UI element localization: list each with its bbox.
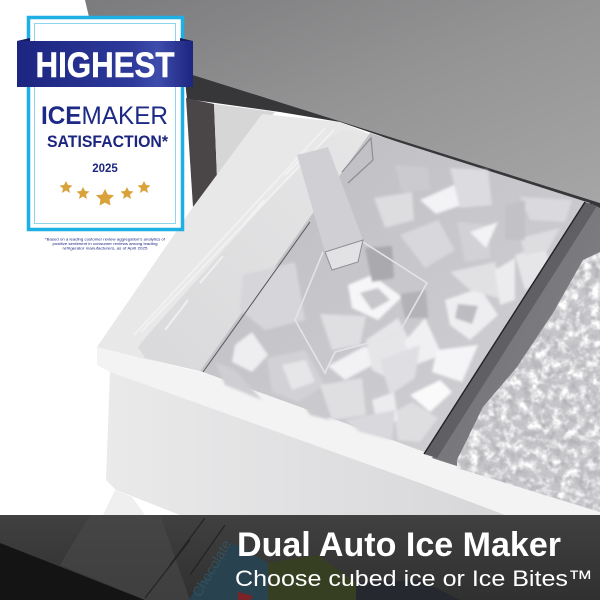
caption subtitle: Choose cubed ice or Ice Bites™ <box>235 566 593 591</box>
scoop handle <box>297 147 363 252</box>
drawer front panel <box>97 350 600 515</box>
dark cabinet side <box>186 98 217 207</box>
bin divider <box>424 202 597 458</box>
gray drawer glare <box>60 515 190 600</box>
drawer front rim <box>97 347 600 515</box>
drawer rim <box>97 114 372 372</box>
bin side clip <box>342 138 373 183</box>
bottom drawer scene <box>0 515 600 600</box>
badge frame <box>28 18 182 230</box>
scoop neck <box>325 240 363 270</box>
box label: Chocolate <box>189 537 234 600</box>
drawer inner wall <box>138 130 372 372</box>
box navy <box>356 580 460 600</box>
door underside <box>184 72 600 212</box>
box green <box>268 555 356 600</box>
footnote: *Based on a leading customer review aggregation's analytics of <box>45 238 165 242</box>
lower drawer stub <box>103 490 145 515</box>
badge <box>17 18 193 250</box>
cubed ice bin <box>200 133 590 453</box>
chocolate box blue <box>188 543 268 600</box>
black shadow wedge <box>0 543 145 600</box>
ribbon text: HIGHEST <box>36 46 174 85</box>
caption title: Dual Auto Ice Maker <box>237 526 561 564</box>
shelf slashes <box>145 518 225 598</box>
cabinet interior wall <box>214 104 275 178</box>
ice bites bin <box>432 204 600 515</box>
crushed ice <box>450 250 600 515</box>
ribbon <box>17 38 193 87</box>
ice scoop <box>295 147 427 373</box>
wall ridges <box>134 128 334 335</box>
footnote: positive sentiment in consumer reviews among leading <box>52 242 158 246</box>
box red mark <box>238 592 253 600</box>
icemaker heading: ICEMAKER <box>41 102 168 130</box>
caption <box>235 526 593 591</box>
footnote <box>45 238 165 250</box>
bin left edge line <box>203 222 310 372</box>
year: 2025 <box>92 163 118 175</box>
refrigerator door <box>85 0 600 203</box>
ice cubes <box>215 165 572 442</box>
stars <box>60 181 150 206</box>
scoop body outline <box>295 242 427 373</box>
footnote: refrigerator manufacturers, as of April 2025 <box>62 246 148 250</box>
satisfaction heading: SATISFACTION* <box>47 133 169 151</box>
